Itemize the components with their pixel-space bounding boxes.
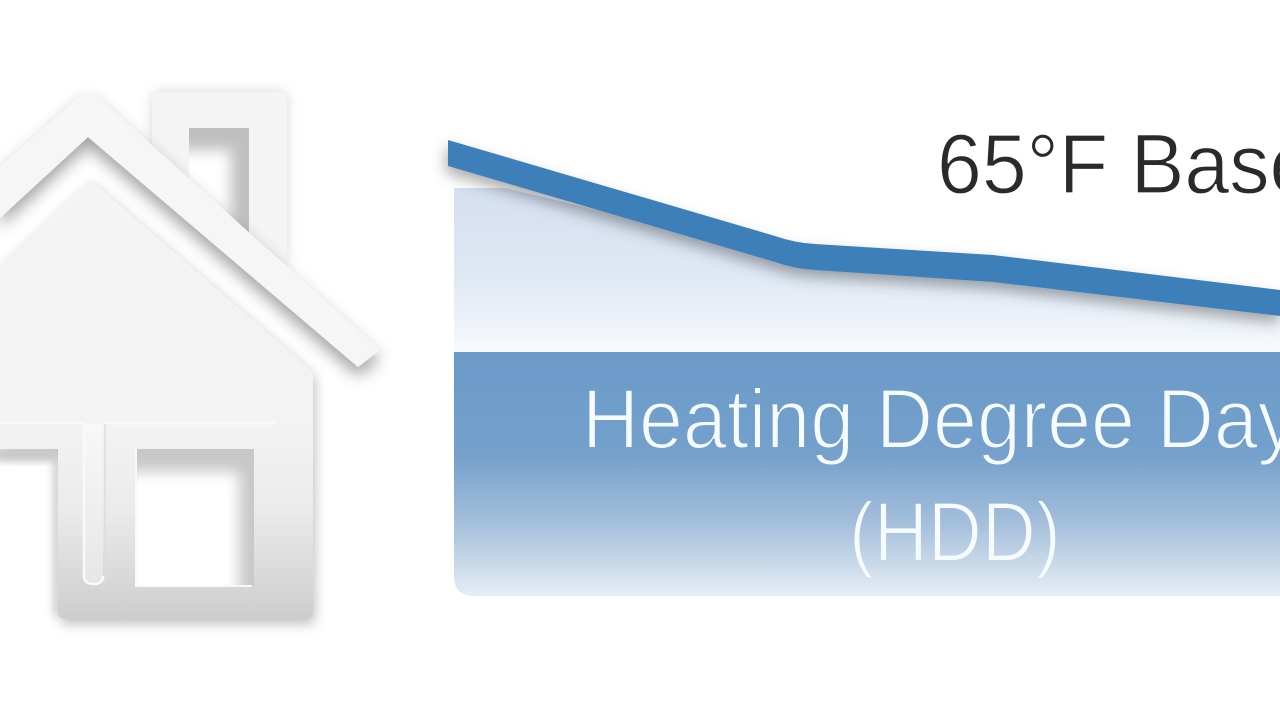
door opening shadow (0, 449, 65, 615)
door groove (0, 423, 276, 584)
infographic canvas (0, 87, 1280, 630)
temperature line (448, 140, 1280, 316)
chimney opening (189, 128, 249, 232)
window opening (137, 449, 254, 586)
icon: house (0, 91, 380, 619)
house body (0, 180, 313, 619)
house roof (0, 91, 380, 367)
heating degree days band (454, 352, 1280, 596)
light area below temperature line (454, 188, 1280, 352)
window highlight (136, 449, 252, 586)
band label line 2: (HDD) (849, 485, 1061, 579)
chart: heating degree days (448, 118, 1280, 596)
house chimney (152, 92, 287, 265)
